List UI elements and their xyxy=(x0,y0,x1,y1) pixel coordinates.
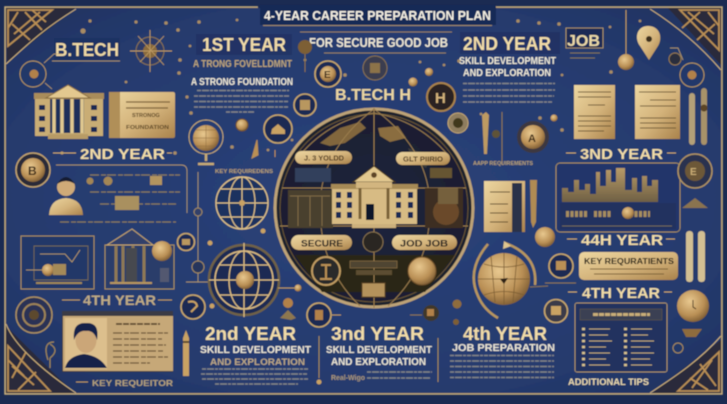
heading: 4th year right: 4TH YEAR xyxy=(582,285,660,302)
globe: lower medallions xyxy=(312,232,436,297)
subtitle xyxy=(300,32,452,53)
block: 2nd year bottom: SKILL DEVELOPMENT xyxy=(200,344,312,356)
icon: ring medallion left xyxy=(16,297,52,333)
title: 4-YEAR CAREER PREPARATION PLAN xyxy=(264,9,491,23)
globe: pill secure xyxy=(291,235,352,250)
heading: 3nd year: 3ND YEAR xyxy=(580,146,663,163)
globe: pill job xyxy=(392,235,457,250)
globe: pill job: JOD JOB xyxy=(400,238,448,250)
icon: university building xyxy=(34,85,104,139)
icon: coin lower right xyxy=(673,290,709,353)
globe: university xyxy=(331,166,418,228)
chart: central globe xyxy=(275,108,473,308)
panel: student portrait xyxy=(49,165,187,222)
heading: 44h year xyxy=(567,232,675,249)
title xyxy=(260,5,496,26)
icon: ring medallion right xyxy=(678,154,712,208)
panel: checklist xyxy=(575,303,667,372)
text: key requeitor: KEY REQUEITOR xyxy=(92,378,173,388)
block: 3nd year bottom: Real-Wigo xyxy=(331,375,365,382)
text: 2nd year subtitle: SKILL DEVELOPMENT xyxy=(459,55,557,67)
icon: ornament left of card xyxy=(46,342,55,368)
block: 3nd year bottom: SKILL DEVELOPMENT xyxy=(326,344,433,356)
heading: JOB xyxy=(566,28,603,58)
block: 4th year bottom: 4th YEAR xyxy=(463,324,547,344)
block: 2nd year bottom: 2nd YEAR xyxy=(205,324,296,344)
icon: medallions around globe top: E xyxy=(324,70,331,81)
icon: coin left xyxy=(16,153,50,187)
heading: 2nd year left xyxy=(53,146,172,163)
text: key requirements small: KEY REQUIREDENS xyxy=(215,169,273,175)
heading: 1st year: 1ST YEAR xyxy=(202,35,286,55)
corner ornament: top left xyxy=(6,8,76,64)
icon: H medallion xyxy=(427,83,455,111)
text: 1st year subtitle: A STRONG FOUNDATION xyxy=(191,77,293,88)
icon: small medallions row 1 xyxy=(236,115,292,158)
connector between blocks xyxy=(316,336,438,384)
heading: 2nd year top: 2ND YEAR xyxy=(463,34,551,54)
icon: connectors and small medallions xyxy=(178,172,266,308)
heading: 2nd year left: 2ND YEAR xyxy=(80,146,165,163)
icon: target compass xyxy=(130,30,172,72)
globe: pill right: GLT PIIRIO xyxy=(403,156,444,164)
icon: balloon pin xyxy=(618,10,660,70)
panel: skyline xyxy=(556,163,680,232)
documents xyxy=(574,85,680,139)
icon: coin left: B xyxy=(28,164,37,178)
corner ornament: bottom left xyxy=(6,324,76,393)
block: 4th year bottom xyxy=(450,324,555,378)
card: id profile xyxy=(62,311,173,372)
icon: H medallion: H xyxy=(435,90,446,107)
corner ornament: bottom right xyxy=(650,336,721,393)
block: 3nd year bottom: 3nd YEAR xyxy=(331,324,424,344)
heading: B.TECH H: B.TECH H xyxy=(335,87,411,104)
text: app requirements small: AAPP REQUIREMENTS xyxy=(473,161,533,167)
text: 1st year body xyxy=(194,90,289,112)
globe: pill 1st year xyxy=(295,151,352,164)
card: foundation: STRONOG xyxy=(132,113,160,119)
heading: 4th year left: 4TH YEAR xyxy=(83,292,156,308)
icon: pen and seal xyxy=(448,112,558,165)
chart: wire globe upper xyxy=(216,177,268,229)
text: 1st year subtitle: A TRONG FOVELLDMNT xyxy=(193,59,292,70)
icon: medallions near 4th year xyxy=(410,227,576,325)
decorative stars xyxy=(60,19,646,155)
block: 3nd year bottom: AND EXPLORATION xyxy=(331,357,426,368)
heading: B.TECH: B.TECH xyxy=(55,40,119,60)
block: 2nd year bottom xyxy=(200,324,312,384)
text: 2nd year subtitle: AND EXPLORATION xyxy=(463,67,551,79)
icon: small medallion 4th year xyxy=(181,295,205,319)
heading: 3nd year xyxy=(566,146,676,163)
document with pen xyxy=(484,180,537,232)
corner ornament: top right xyxy=(650,8,721,70)
callout: key requirements: KEY REQURATIENTS xyxy=(584,256,674,266)
text: 2nd year body xyxy=(463,84,555,102)
block: 3nd year bottom xyxy=(326,324,433,382)
heading: JOB: JOB xyxy=(567,33,600,50)
block: 4th year bottom: JOB PREPARATION xyxy=(452,342,555,354)
icon: small globe on stand xyxy=(189,120,223,164)
icon: ring left xyxy=(20,54,62,89)
icon: ring medallion right: E xyxy=(690,167,697,178)
icon: tubes top right xyxy=(689,88,708,145)
icon: ring right xyxy=(669,48,704,87)
card: foundation xyxy=(109,92,175,138)
panel: museum xyxy=(105,229,174,289)
heading: 44h year: 44H YEAR xyxy=(581,232,663,249)
icon: tubes lower right xyxy=(686,231,705,282)
subtitle: FOR SECURE GOOD JOB xyxy=(309,36,448,50)
chart: wire globe large xyxy=(209,243,279,317)
chart: gold globe xyxy=(474,241,535,318)
block: 2nd year bottom: AND EXPLORATION xyxy=(210,357,305,368)
icon: medallions below globe xyxy=(278,284,341,327)
globe: pill 1st year: J. 3 YOLDD xyxy=(304,156,344,162)
globe: pill secure: SECURE xyxy=(301,238,343,250)
card: foundation: FOUNDATION xyxy=(126,125,169,131)
callout: key requirements xyxy=(579,252,678,280)
globe: pill right xyxy=(396,152,450,165)
panel: map xyxy=(21,236,94,289)
icon: medallions around globe top xyxy=(294,40,433,116)
icon: pen lower left xyxy=(183,330,189,376)
text: 1st year subtitle xyxy=(191,59,293,88)
text: additional tips: ADDITIONAL TIPS xyxy=(568,377,649,387)
icon: pen and seal: A xyxy=(528,133,536,145)
heading: 4th year left xyxy=(62,292,172,308)
text: 2nd year subtitle xyxy=(459,55,557,79)
